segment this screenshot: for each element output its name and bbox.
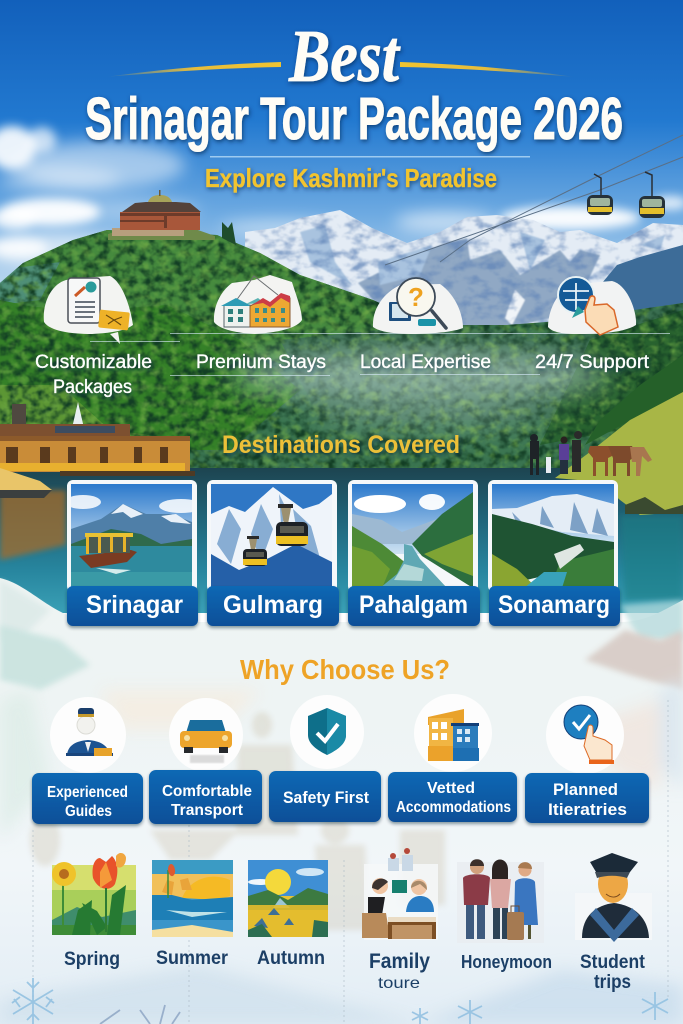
- forest hills: [0, 230, 683, 468]
- item: planned itineraries: Itieratries: [548, 800, 627, 819]
- pale bottom section: [0, 578, 683, 1024]
- label: [388, 772, 517, 822]
- snow mountains: [245, 210, 683, 325]
- item: planned itineraries: [525, 696, 649, 823]
- label: Honeymoon: [461, 952, 552, 972]
- audience: family tours: [362, 848, 438, 992]
- feature: customizable packages: Packages: [53, 377, 132, 398]
- label: [32, 773, 143, 824]
- label: 24/7 Support: [535, 352, 650, 373]
- card labels: Srinagar: [86, 591, 183, 619]
- card labels: Gulmarg: [223, 591, 323, 619]
- gondola right: [639, 172, 665, 218]
- label: [269, 771, 381, 822]
- label: [525, 773, 649, 823]
- clouds: [0, 126, 683, 268]
- feature: local expertise: [360, 278, 491, 373]
- label: Family: [369, 950, 430, 973]
- card labels: Sonamarg: [498, 591, 610, 619]
- thin mist lines: [90, 333, 670, 376]
- label: Local Expertise: [360, 352, 491, 373]
- season: autumn: [248, 860, 328, 969]
- card: Gulmarg: [207, 480, 337, 592]
- subtitle: Explore Kashmir's Paradise: [205, 163, 497, 193]
- season: summer: [152, 860, 233, 969]
- title: [85, 16, 623, 193]
- item: comfortable transport: Comfortable: [162, 783, 252, 800]
- cable car with two gondolas: [385, 135, 683, 265]
- card: Sonamarg: [488, 480, 618, 592]
- audience: student trips: [575, 853, 652, 993]
- seasons row: [52, 848, 652, 993]
- destination cards: [65, 480, 620, 626]
- title swooshes: [105, 62, 575, 77]
- why choose us row: [32, 694, 649, 824]
- item: vetted accommodations: Accommodations: [396, 799, 511, 816]
- feature row: [35, 275, 650, 398]
- item: experienced guides: Guides: [65, 803, 112, 820]
- snowflake decorations: [12, 978, 668, 1024]
- label: Spring: [64, 949, 120, 970]
- label: Student: [580, 952, 646, 973]
- title: Best: Best: [288, 16, 401, 98]
- gondola large: [276, 504, 308, 546]
- item: experienced guides: Experienced: [47, 784, 128, 801]
- gondola small: [243, 536, 267, 566]
- card labels: [86, 591, 610, 619]
- houseboat: [0, 402, 195, 498]
- feature: 24/7 support: [535, 277, 650, 373]
- right forest and grass hillside: [585, 355, 683, 445]
- heading: why choose us: Why Choose Us?: [240, 654, 450, 685]
- card labels: Pahalgam: [359, 591, 468, 619]
- item: safety first: [269, 695, 381, 822]
- season: spring: [52, 853, 136, 970]
- item: comfortable transport: Transport: [171, 802, 244, 819]
- feature: customizable packages: [35, 276, 152, 398]
- item: comfortable transport: [149, 698, 262, 824]
- item: vetted accommodations: Vetted: [427, 780, 475, 797]
- label: Customizable: [35, 352, 152, 373]
- label: Premium Stays: [196, 352, 326, 373]
- label: [149, 770, 262, 824]
- hilltop palace: [108, 190, 236, 245]
- feature: premium stays: [196, 275, 326, 373]
- lake: [0, 468, 683, 613]
- feature: local expertise: ?: [408, 282, 424, 312]
- card: Srinagar: [65, 480, 203, 592]
- gondola left: [587, 174, 613, 215]
- label: Autumn: [257, 948, 325, 969]
- heading: destinations covered: Destinations Covered: [222, 431, 460, 459]
- item: safety first: Safety First: [283, 788, 369, 807]
- card: Pahalgam: [348, 480, 478, 592]
- item: planned itineraries: Planned: [553, 780, 618, 799]
- item: vetted accommodations: [388, 694, 517, 822]
- label: Summer: [156, 948, 229, 969]
- audience: family tours: toure: [378, 975, 420, 992]
- label bars: [67, 586, 620, 626]
- audience: honeymoon: [457, 859, 552, 972]
- trekkers and horses: [530, 431, 652, 476]
- item: experienced guides: [32, 697, 143, 824]
- audience: student trips: trips: [594, 972, 631, 993]
